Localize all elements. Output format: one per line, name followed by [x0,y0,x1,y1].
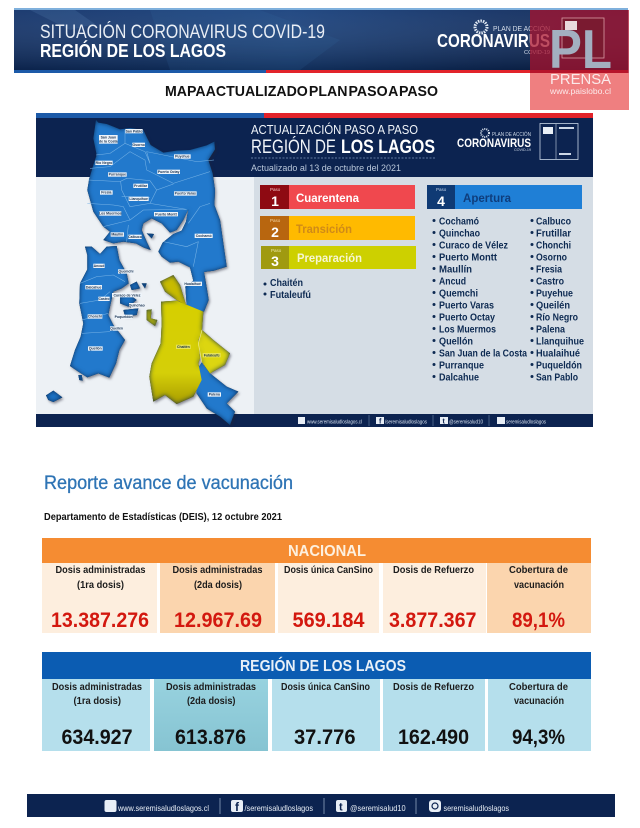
paso 4 comunas, second column: Puyehue [536,288,573,300]
header logo: plan de accion coronavirus: PLAN DE ACCIÓN [493,24,550,33]
government logo [540,124,578,160]
nacional card: first dose [42,563,157,633]
commune labels: Puerto Octay [158,170,180,174]
commune labels: Chaitén [177,345,190,349]
map panel title: ACTUALIZACIÓN PASO A PASO [251,122,418,137]
region card: second dose [154,679,268,751]
chiloe island [70,246,129,378]
region card: cansino: 37.776 [294,726,356,749]
icon: facebook [231,800,243,814]
region card: first dose: 634.927 [62,726,132,749]
watermark: PL Prensa: www.paislobo.cl [549,87,611,96]
commune labels: Quinchao [129,303,145,307]
paso 4 comunas, first column: Curaco de Vélez [439,240,508,252]
paso 3 comunas: Futaleufú [270,289,311,301]
header logo: plan de accion coronavirus: CORONAVIRUS [437,31,550,51]
paso 3 preparacion: Preparación [297,251,362,265]
region card: cansino [272,679,380,751]
paso 4 apertura: Paso [436,187,447,192]
futaleufu [198,330,230,373]
palena commune [195,362,238,425]
table: nacional [42,538,591,633]
map of Los Lagos communes [46,120,238,425]
paso 4 comunas, second column: Palena [536,324,565,336]
chaiten main [149,301,203,404]
commune labels: Futaleufú [204,353,220,357]
commune labels: Puyehue [175,155,190,159]
region card: cansino: Dosis única CanSino [281,681,370,693]
paso 1 cuarentena: Cuarentena [296,191,359,205]
paso 3 comunas: Chaitén [270,277,303,289]
paso 4 comunas, second column: San Pablo [536,372,578,384]
paso 4 comunas, second column: Puqueldón [536,360,582,372]
region card: first dose: (1ra dosis) [74,695,121,707]
region card: second dose: 613.876 [175,726,246,749]
nacional card: booster [383,563,486,633]
commune labels: Puqueldón [115,315,133,319]
paso 4 comunas, second column: Fresia [536,264,562,276]
paso 4 comunas, first column: Puerto Varas [439,300,494,312]
nacional card: cansino: Dosis única CanSino [284,564,373,576]
paso 2 transicion: 2 [271,224,279,240]
paso 1 cuarentena: Paso [270,187,281,192]
paso 4 comunas, first column: Ancud [439,276,466,288]
header title: SITUACIÓN CORONAVIRUS COVID-19 [40,21,325,43]
region card: first dose: Dosis administradas [52,681,142,693]
commune labels: Fresia [101,191,112,195]
nacional card: cansino: 569.184 [292,609,365,632]
commune labels: Puerto Montt [155,212,178,216]
nacional card: coverage: 89,1% [512,609,565,632]
paso 4 comunas, first column: Los Muermos [439,324,496,336]
watermark: PL Prensa: PL [549,18,612,80]
paso 4 apertura [427,185,582,209]
region card: coverage: Cobertura de [509,681,568,693]
footer social bar: www.seremisaludloslagos.cl [117,803,209,813]
header title [40,21,325,61]
commune labels [85,129,221,397]
commune labels: Quellón [89,347,102,351]
icon: facebook: f [235,800,240,814]
paso 4 comunas, first column: Maullín [439,264,472,276]
region card: first dose [42,679,150,751]
footer social bar: seremisaludloslagos [444,803,509,813]
commune labels: Queilén [110,327,123,331]
commune labels: Puerto Varas [175,192,196,196]
region card: coverage: 94,3% [512,726,565,749]
paso 4 comunas, second column: Calbuco [536,216,571,228]
section heading: mapa actualizado: MAPA ACTUALIZADO PLAN PASO A PASO [165,83,438,100]
header logo: plan de accion coronavirus [437,21,550,56]
watermark: PL Prensa [530,10,629,110]
paso 1 cuarentena [260,185,415,209]
paso 4 apertura: Apertura [463,191,511,205]
paso 4 comunas, first column: Quinchao [439,228,480,240]
commune labels: Quemchi [119,270,133,274]
paso 4 comunas, first column: Purranque [439,360,484,372]
commune labels: Purranque [109,173,126,177]
paso 4 comunas, second column: Río Negro [536,312,578,324]
map panel social strip: www.seremisaludloslagos.cl [306,420,362,426]
icon: twitter [336,800,347,814]
table: region de los lagos [42,652,591,751]
map panel social strip: f [379,418,382,426]
paso 4 comunas, second column: Castro [536,276,564,288]
commune labels: Ancud [94,264,104,268]
map panel social strip: t [442,418,446,426]
paso 4 comunas, first column: Quellón [439,336,473,348]
header title: REGIÓN DE LOS LAGOS [40,40,226,61]
region heading: REGIÓN DE LOS LAGOS [240,656,406,675]
paso 4 comunas, second column: Queilén [536,300,570,312]
header logo: plan de accion coronavirus: COVID-19 [524,50,550,56]
paso 3 preparacion: Paso [271,248,282,253]
map panel title: LOS LAGOS [341,137,435,158]
commune labels: San Juan [101,136,116,140]
commune labels: San Pablo [126,129,142,133]
map panel social strip: @seremisalud10 [449,420,483,426]
footer social bar: @seremisalud10 [350,803,406,813]
map panel title: Actualizado al 13 de octubre del 2021 [251,163,401,173]
paso 1 cuarentena: 1 [271,193,279,209]
nacional heading: NACIONAL [288,543,366,560]
icon: instagram [429,800,441,812]
commune labels: Chonchi [88,315,102,319]
commune labels: Curaco de Vélez [114,293,141,297]
paso 4 comunas, second column: Osorno [536,252,567,264]
map panel title [251,122,435,173]
paso 4 comunas, first column: Cochamó [439,216,479,228]
paso 4 comunas, first column: Quemchi [439,288,478,300]
region card: booster [383,679,485,751]
map panel logo: COVID-19 [514,147,532,152]
nacional card: cansino [278,563,379,633]
region card: booster: 162.490 [398,726,469,749]
commune labels: Palena [209,393,220,397]
nacional card: booster: 3.877.367 [389,609,476,632]
nacional card: booster: Dosis de Refuerzo [393,564,474,576]
paso 2 transicion: Transición [296,222,352,236]
paso 4 comunas, first column [432,216,527,384]
icon: twitter: t [339,802,343,814]
paso 4 comunas, first column: San Juan de la Costa [439,348,527,360]
nacional card: first dose: (1ra dosis) [77,579,124,591]
commune labels: Cochamó [196,234,212,238]
paso 3 preparacion [261,246,416,269]
watermark: PL Prensa: PRENSA [550,71,611,88]
nacional card: second dose: 12.967.69 [174,609,262,632]
commune labels: Calbuco [128,235,142,239]
commune labels: Castro [98,297,110,301]
paso 4 comunas, second column: Frutillar [536,228,571,240]
paso 4 comunas, first column: Dalcahue [439,372,479,384]
paso 2 transicion: Paso [270,218,281,223]
map panel logo: CORONAVIRUS [457,136,531,150]
chaiten north [160,275,186,305]
mainland north [87,120,227,312]
map panel title: REGIÓN DE [251,136,336,158]
commune labels: Llanquihue [129,197,148,201]
commune labels: Río Negro [96,161,112,165]
paso 2 transicion [260,216,415,240]
map panel social strip: seremisaludloslagos [506,420,546,426]
region card: second dose: (2da dosis) [187,695,236,707]
paso 4 comunas, second column [530,216,584,384]
paso 3 comunas [264,277,311,301]
commune labels: Osorno [132,143,145,147]
region card: second dose: Dosis administradas [166,681,256,693]
map panel logo: PLAN DE ACCIÓN [492,131,531,138]
footer social bar: /seremisaludloslagos [244,803,313,813]
nacional card: second dose: (2da dosis) [194,579,242,591]
nacional card: first dose: Dosis administradas [56,564,146,576]
commune labels: Frutillar [134,184,148,188]
paso 4 comunas, first column: Puerto Octay [439,312,495,324]
commune labels: Dalcahue [86,285,101,289]
panel: mapa paso a paso [36,113,593,427]
nacional card: coverage [487,563,591,633]
yellow islets [147,309,157,326]
paso 3 preparacion: 3 [271,253,279,269]
map panel social strip [298,415,546,426]
commune labels: Hualaihué [184,282,201,286]
paso 4 comunas, first column: Puerto Montt [439,252,497,264]
map panel logo [457,129,532,152]
footer social bar [27,794,615,817]
source line: Departamento de Estadísticas (DEIS), 12 octubre 2021 [44,512,282,523]
nacional card: second dose [160,563,275,633]
nacional card: coverage: vacunación [514,579,564,591]
commune labels: de la Costa [99,139,118,143]
small islands [46,233,154,402]
commune labels: Maullín [111,233,123,237]
nacional card: coverage: Cobertura de [509,564,568,576]
paso 4 comunas, second column: Llanquihue [536,336,584,348]
vaccination report heading: Reporte avance de vacunación [44,473,293,494]
header banner [14,8,628,73]
paso 4 comunas, second column: Hualaihué [536,348,580,360]
nacional card: first dose: 13.387.276 [51,609,149,632]
paso 4 comunas, second column: Chonchi [536,240,571,252]
nacional card: second dose: Dosis administradas [172,564,263,576]
paso 4 apertura: 4 [437,193,445,209]
commune labels: Los Muermos [99,212,122,216]
map panel social strip: /seremisaludloslagos [385,420,427,426]
icon: web [104,800,116,812]
region card: booster: Dosis de Refuerzo [393,681,474,693]
region card: coverage [488,679,591,751]
commune borders [80,130,214,333]
region card: coverage: vacunación [514,695,564,707]
